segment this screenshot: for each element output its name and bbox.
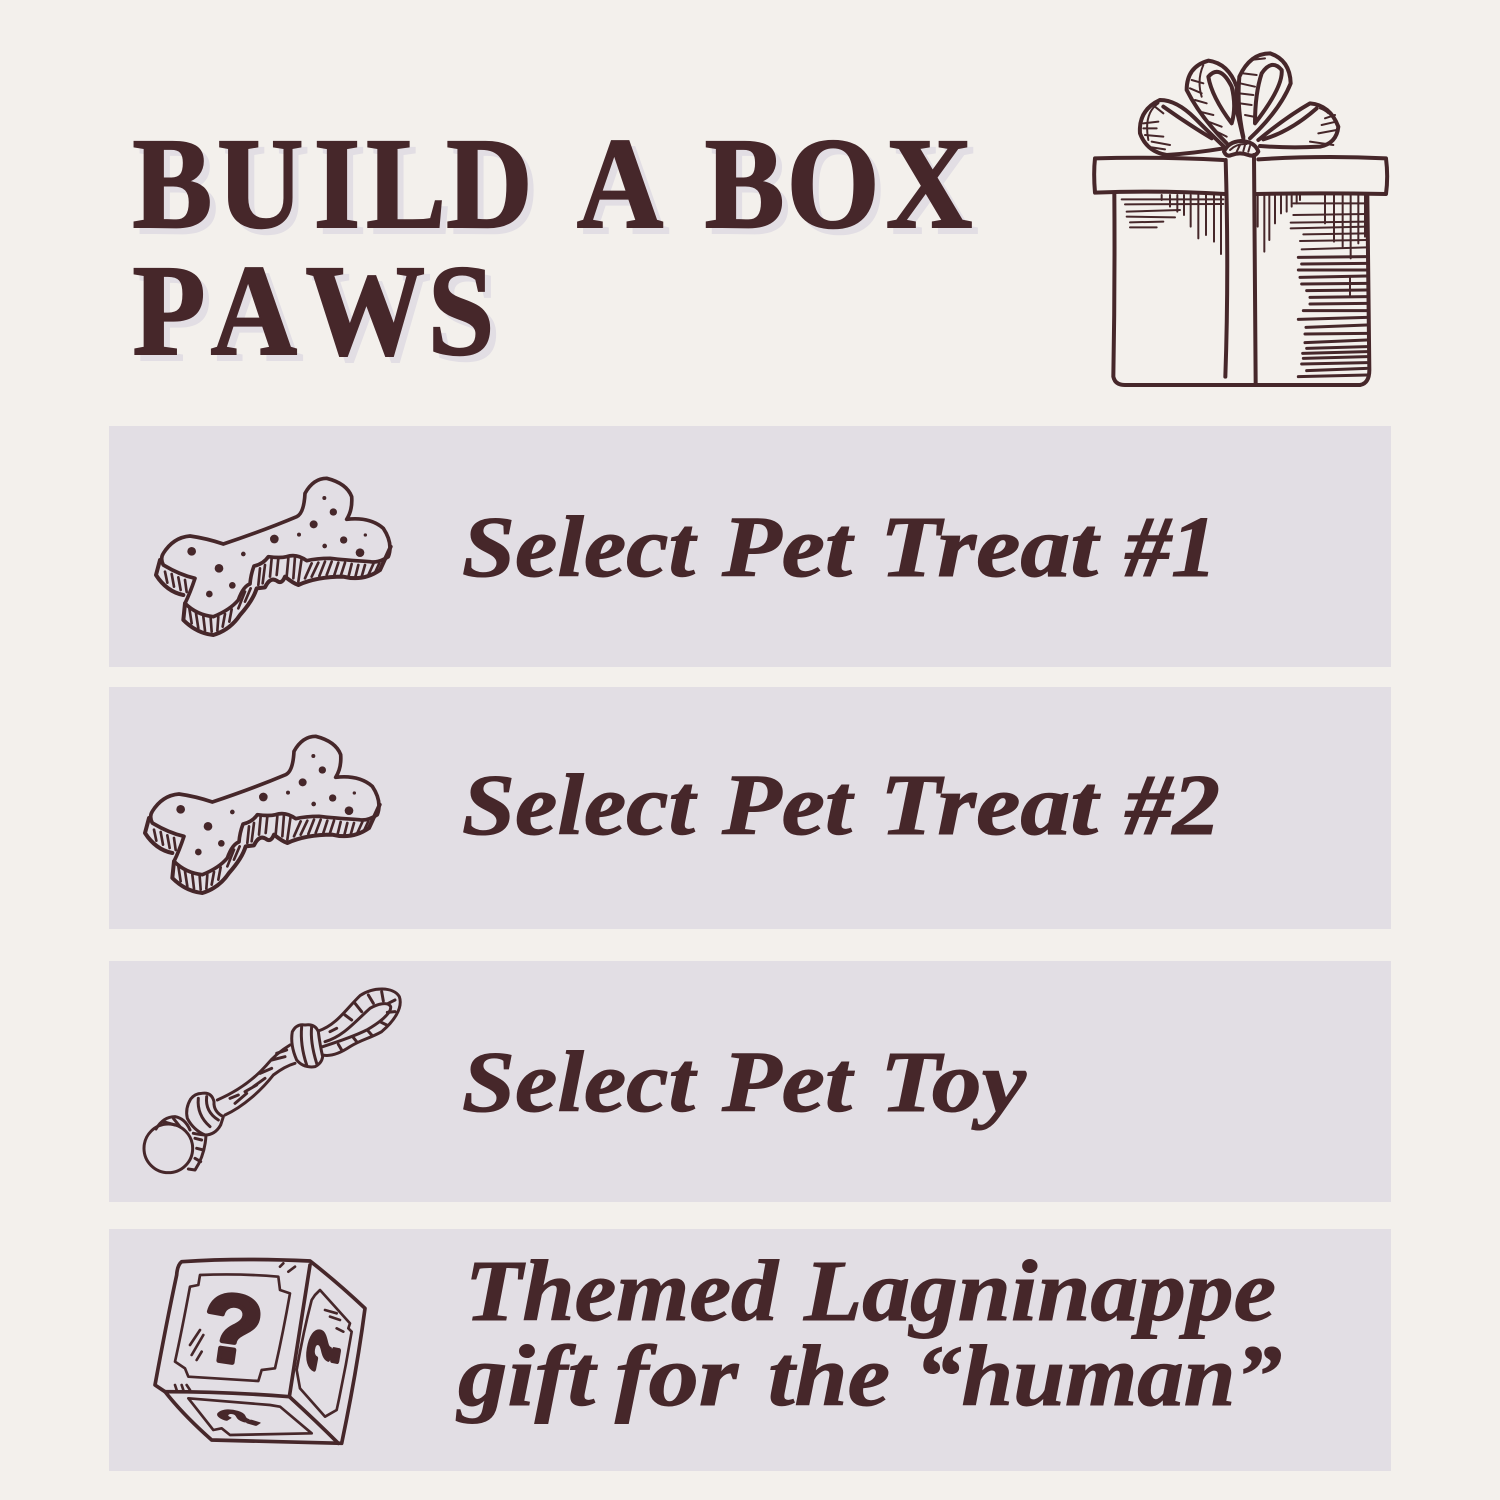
icon: bone 2	[145, 736, 380, 893]
title: PAWS	[132, 240, 494, 383]
panel: pet treat 1	[109, 426, 1391, 667]
label: pet toy	[462, 1033, 1026, 1130]
icon glyph: side question mark: ?	[296, 1324, 352, 1379]
panel: pet toy	[109, 961, 1391, 1202]
label: pet treat 1: Pet	[721, 498, 855, 595]
title: BOX	[705, 113, 972, 256]
icon glyph: bottom question mark: ?	[205, 1405, 277, 1432]
title: A	[583, 119, 669, 262]
label: lagniappe line 1 and 2	[456, 1242, 1282, 1424]
label: pet toy: Pet	[721, 1033, 855, 1130]
title	[132, 113, 978, 389]
panel: lagniappe	[109, 1229, 1391, 1471]
label: lagniappe line 1 and 2: Lagninappe	[803, 1242, 1276, 1339]
label: lagniappe line 1 and 2: the	[768, 1327, 890, 1424]
label: pet toy: Select	[462, 1033, 698, 1130]
panel: pet treat 2	[109, 687, 1391, 929]
label: pet toy: Toy	[880, 1033, 1026, 1130]
icon: gift box	[1094, 53, 1387, 385]
label: pet treat 1: #1	[1124, 498, 1217, 595]
title: BOX	[711, 119, 978, 262]
label: pet treat 1: Select	[462, 498, 698, 595]
label: pet treat 2: Pet	[721, 756, 855, 853]
icon glyph: front question mark: ?	[195, 1272, 269, 1387]
label: pet treat 2: Select	[462, 756, 698, 853]
title: BUILD	[138, 119, 539, 262]
label: pet treat 1: Treat	[880, 498, 1101, 595]
title: BUILD	[132, 113, 533, 256]
icon: mystery cube	[155, 1259, 365, 1443]
label: pet treat 1	[462, 498, 1217, 595]
title: PAWS	[138, 246, 500, 389]
label: lagniappe line 1 and 2: “human”	[915, 1327, 1282, 1424]
label: pet treat 2: #2	[1124, 756, 1220, 853]
label: lagniappe line 1 and 2: for	[615, 1327, 739, 1424]
icon: rope toy	[144, 989, 400, 1173]
label: lagniappe line 1 and 2: gift	[456, 1327, 598, 1424]
label: lagniappe line 1 and 2: Themed	[465, 1242, 780, 1339]
title: A	[577, 113, 663, 256]
icon: bone 1	[156, 478, 391, 635]
label: pet treat 2: Treat	[880, 756, 1101, 853]
label: pet treat 2	[462, 756, 1220, 853]
